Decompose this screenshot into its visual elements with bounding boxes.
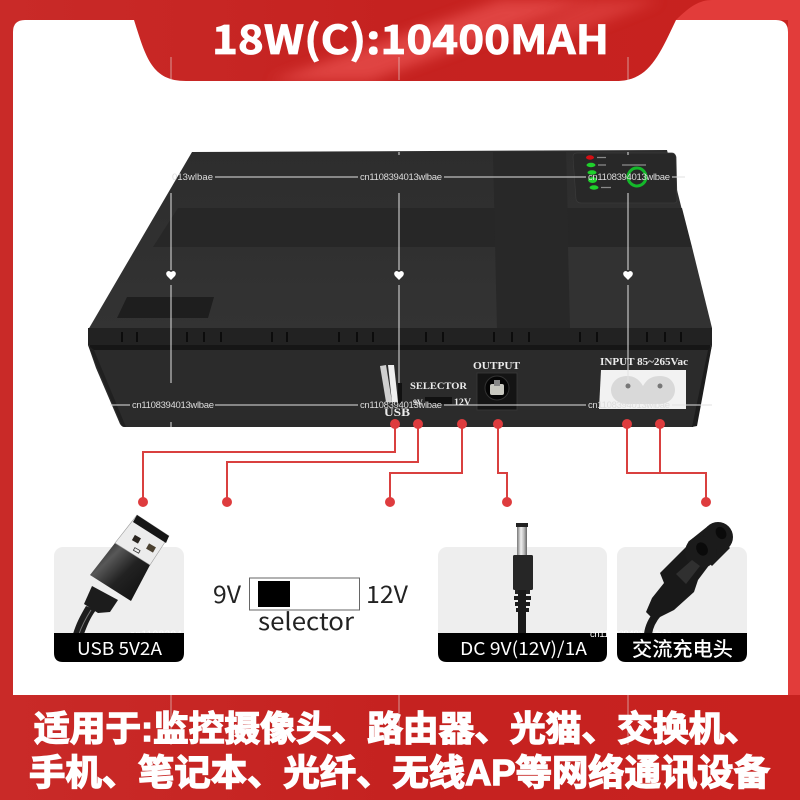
DC jack	[477, 373, 517, 410]
device: black UPS unit	[88, 150, 712, 427]
indicator panel	[573, 153, 677, 203]
AC label bar	[617, 633, 747, 662]
watermark overlay: cn1108394013wlbae	[132, 400, 214, 411]
front face	[88, 345, 712, 427]
title: 18W(C):10400MAH	[212, 8, 609, 66]
SELECTOR label: SELECTOR	[410, 382, 467, 392]
connector leader lines	[143, 424, 706, 502]
watermark overlay: cn1108394013wlbae	[360, 172, 442, 183]
switch box	[250, 578, 360, 610]
label recess	[117, 297, 214, 318]
footer line 2: 手机、笔记本、光纤、无线AP等网络通讯设备	[29, 752, 770, 793]
AC socket	[599, 370, 686, 409]
selector switch: 9V	[413, 398, 423, 407]
device top surface	[88, 150, 712, 330]
card watermark: cn1108394	[130, 629, 182, 640]
centre dark strip	[493, 152, 571, 330]
selector switch: 12V	[454, 397, 472, 407]
selector switch	[413, 397, 472, 407]
USB label bar	[54, 633, 184, 662]
watermark overlay: cn1108394013wlbae	[588, 400, 670, 411]
selector diagram	[213, 575, 408, 637]
INPUT label: INPUT 85~265Vac	[600, 357, 689, 368]
OUTPUT label: OUTPUT	[473, 361, 520, 372]
footer line 1: 适用于:监控摄像头、路由器、光猫、交换机、	[34, 710, 760, 749]
power ring	[628, 168, 646, 186]
DC label bar	[438, 633, 607, 662]
watermark overlay: 013wlbae	[172, 172, 213, 183]
LED indicators	[586, 155, 594, 160]
heart markers	[166, 271, 633, 280]
USB label text: USB 5V2A	[77, 635, 162, 661]
card: USB cable	[54, 515, 184, 662]
icon: USB plug	[73, 515, 169, 634]
watermark overlay	[110, 57, 712, 745]
card watermark: cn1108394013wlbae	[590, 629, 672, 640]
watermark overlay: cn1108394013wlbae	[360, 400, 442, 411]
icon: DC barrel plug	[513, 523, 533, 633]
USB label: USB	[384, 405, 410, 419]
12V label: 12V	[366, 575, 408, 610]
AC label text: 交流充电头	[632, 633, 733, 662]
watermark overlay: cn1108394013wlbae	[588, 172, 670, 183]
9V label: 9V	[213, 575, 241, 610]
card: DC plug	[438, 523, 607, 662]
selector caption: selector	[258, 602, 355, 637]
switch knob	[258, 581, 290, 607]
vent band	[88, 328, 712, 345]
rear right panel	[568, 247, 712, 328]
icon: AC figure-8 plug	[646, 522, 733, 634]
card: AC plug	[590, 522, 747, 662]
DC label text: DC 9V(12V)/1A	[460, 635, 587, 661]
darker centre band	[153, 208, 692, 247]
USB port	[380, 365, 402, 403]
leader dots	[138, 419, 711, 507]
footer text block	[29, 710, 770, 793]
